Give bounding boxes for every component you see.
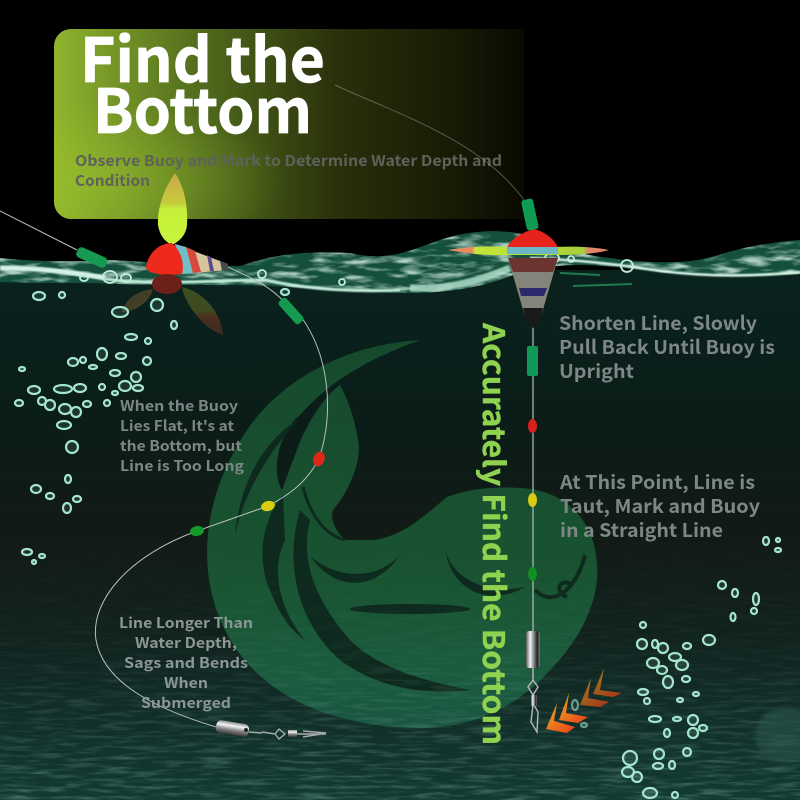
right caption: shorten line (559, 309, 775, 384)
left caption: buoy lies flat: Line is Too Long (120, 455, 244, 476)
subtitle: Condition (75, 170, 150, 191)
seabed texture (0, 630, 800, 800)
left caption: buoy lies flat: Lies Flat, It's at (120, 415, 234, 436)
underwater background (0, 270, 800, 800)
right sinker and swivel (526, 631, 540, 732)
left float tubes (75, 246, 305, 325)
title: Bottom (93, 62, 312, 151)
left marker beads (189, 450, 327, 537)
right caption: shorten line: Shorten Line, Slowly (559, 309, 757, 336)
left float tilted flat (122, 173, 228, 335)
title (80, 11, 325, 151)
left caption: buoy lies flat (120, 395, 244, 476)
right float upright (448, 198, 609, 328)
right line stopper and beads (527, 346, 538, 581)
right caption: shorten line: Pull Back Until Buoy is (559, 333, 775, 360)
float red dome (146, 243, 183, 275)
float striped body (175, 244, 228, 274)
float lower fins (122, 287, 223, 335)
brand swirl emblem (207, 340, 597, 728)
float upper fin (158, 173, 187, 245)
left caption: line longer than depth: Sags and Bends (124, 652, 248, 673)
left caption: line longer than depth: When (164, 672, 208, 693)
submerged dome reflection (152, 274, 182, 294)
vertical green heading: Accurately Find the Bottom (474, 322, 518, 745)
subtitle: Observe Buoy and Mark to Determine Water Depth and (75, 150, 502, 171)
left fishing line (0, 211, 328, 727)
left sinker and swivel (215, 720, 326, 739)
right float fins (448, 246, 609, 255)
right float red dome (507, 229, 558, 248)
right caption: line taut: Taut, Mark and Buoy (560, 492, 760, 519)
seabed light patch (755, 707, 800, 763)
left caption: line longer than depth: Line Longer Than (119, 612, 253, 633)
header panel (54, 29, 524, 219)
right float blue band (507, 247, 558, 254)
title: Find the (80, 11, 325, 100)
left caption: line longer than depth: Water Depth, (135, 632, 237, 653)
right caption: shorten line: Upright (559, 357, 634, 384)
right caption: line taut: in a Straight Line (560, 516, 723, 543)
orange direction arrows (546, 668, 622, 733)
right fishing line (335, 85, 533, 632)
left caption: buoy lies flat: the Bottom, but (120, 435, 242, 456)
left caption: line longer than depth (119, 612, 253, 713)
right bubble cluster (572, 537, 781, 798)
right float cone (508, 258, 558, 328)
left bubble cluster (15, 289, 289, 564)
water surface wave (0, 231, 800, 294)
right caption: line taut (559, 468, 760, 543)
left caption: buoy lies flat: When the Buoy (120, 395, 239, 416)
right float top tube (521, 198, 539, 231)
subtitle (75, 150, 502, 191)
left caption: line longer than depth: Submerged (141, 692, 231, 713)
right caption: line taut: At This Point, Line is (559, 468, 755, 495)
